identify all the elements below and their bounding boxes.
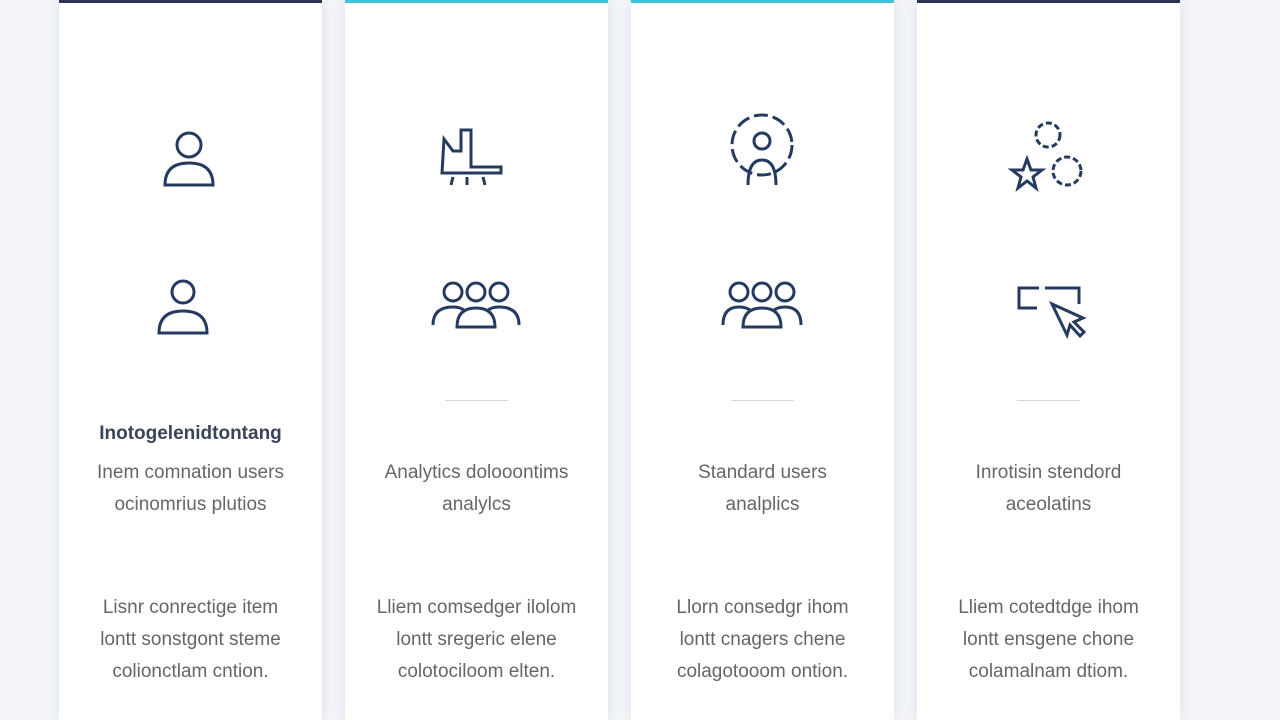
icon: user 2	[158, 280, 208, 334]
heading: Inotogelenidtontang	[99, 423, 282, 444]
body text: colotociloom elten.	[398, 661, 555, 682]
body text: lontt cnagers chene	[680, 629, 845, 650]
icon: screen cursor	[1018, 286, 1086, 339]
subtitle: Inem comnation users	[97, 462, 284, 483]
subtitle: analylcs	[442, 494, 511, 515]
body text: colamalnam dtiom.	[969, 661, 1128, 682]
body text: Lisnr conrectige item	[103, 597, 278, 618]
subtitle: Analytics dolooontims	[385, 462, 568, 483]
card 2	[345, 0, 608, 720]
subtitle: ocinomrius plutios	[114, 494, 267, 515]
body text: colionctlam cntion.	[112, 661, 269, 682]
icon: user	[164, 132, 214, 186]
icon: gear user	[730, 114, 794, 185]
icon: group	[432, 282, 520, 328]
body text: lontt ensgene chone	[963, 629, 1134, 650]
body text	[377, 597, 576, 682]
subtitle: analplics	[726, 494, 799, 515]
subtitle	[97, 462, 284, 515]
body text	[958, 597, 1139, 682]
body text: colagotooom ontion.	[677, 661, 848, 682]
subtitle	[384, 462, 568, 515]
body text: Llorn consedgr ihom	[676, 597, 849, 618]
body text	[100, 597, 281, 682]
body text: Lliem comsedger ilolom	[377, 597, 576, 618]
subtitle: Inrotisin stendord	[976, 462, 1121, 483]
subtitle	[976, 462, 1121, 515]
icon: gears star	[1008, 122, 1082, 192]
subtitle	[698, 462, 827, 515]
card 3	[631, 0, 894, 720]
icon: chart	[440, 128, 502, 186]
body text: lontt sonstgont steme	[100, 629, 281, 650]
subtitle: Standard users	[698, 462, 827, 483]
card 4	[917, 0, 1180, 720]
body text: lontt sregeric elene	[396, 629, 557, 650]
card 1	[59, 0, 322, 720]
subtitle: aceolatins	[1006, 494, 1091, 515]
icon: group	[722, 282, 802, 328]
body text: Lliem cotedtdge ihom	[958, 597, 1139, 618]
body text	[676, 597, 849, 682]
